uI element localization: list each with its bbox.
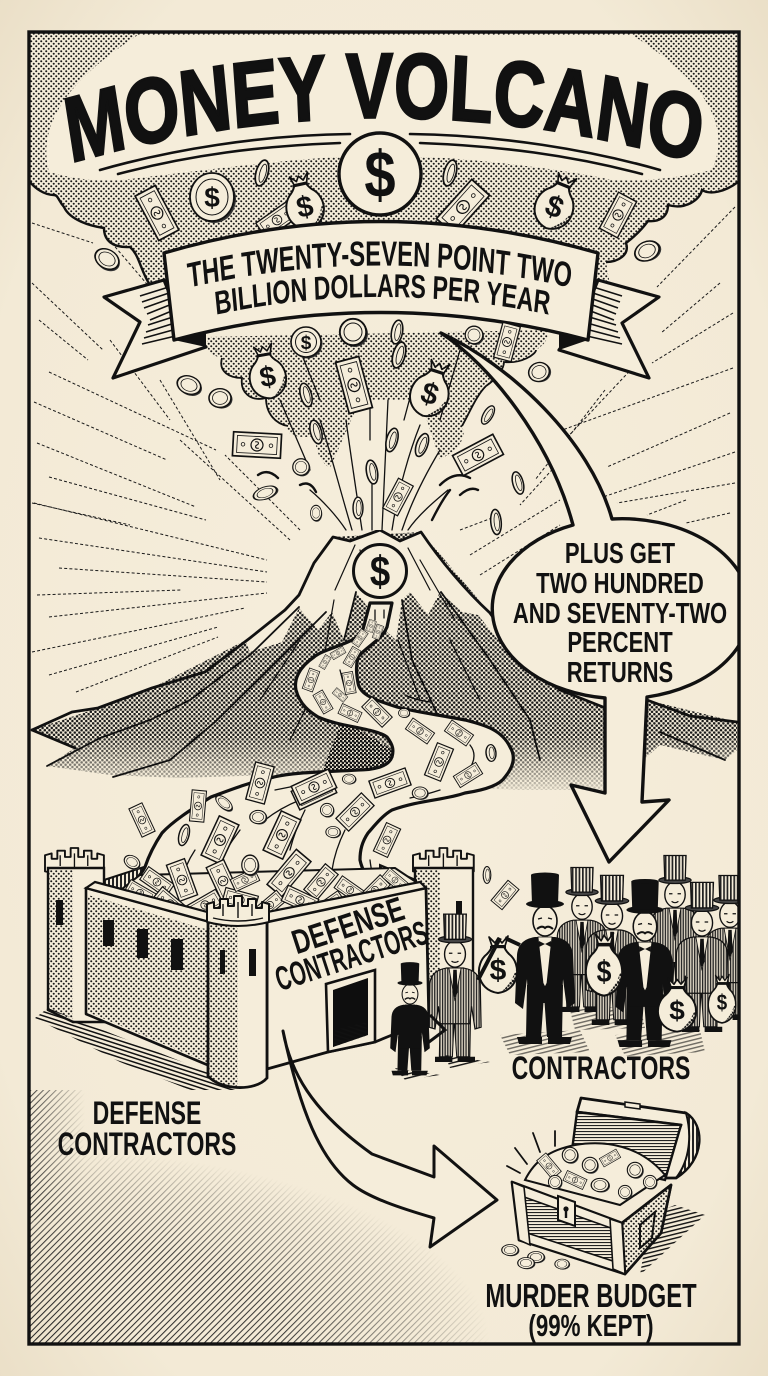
central dollar medallion: $: [364, 138, 396, 211]
front tower: [208, 916, 267, 1088]
grey-suited man: [429, 914, 481, 1062]
cloud outline: [221, 350, 536, 426]
banner text line 2: BILLION DOLLARS PER YEAR: [215, 274, 550, 315]
label: murder budget: [485, 1278, 697, 1343]
river bills: [366, 619, 376, 633]
money bags held: $: [597, 955, 611, 989]
group of contractors: $: [717, 991, 728, 1016]
chest handle: [640, 1212, 655, 1248]
sparkle ticks: [507, 1131, 555, 1173]
chest shadow: [640, 1205, 705, 1275]
erupting streaks: [280, 350, 460, 530]
crater dollar medallion: $: [370, 548, 390, 596]
callout bubble with curved arrow: [441, 333, 750, 862]
wall windows: [103, 920, 114, 946]
snowy cream cap: [245, 530, 498, 652]
left wall: [86, 888, 210, 1066]
callout text: PLUS GET: [565, 538, 675, 570]
arrow from fortress to chest: [283, 1031, 497, 1247]
flying money above banner: $: [540, 189, 569, 226]
fortress: [35, 882, 429, 1090]
flying money above banner: [91, 159, 665, 275]
ground shadow hatching: [35, 1008, 240, 1090]
treasure chest: [502, 1098, 705, 1275]
fortress sign: DEFENSE CONTRACTORS: DEFENSE: [287, 890, 409, 962]
fortress sign: DEFENSE CONTRACTORS: CONTRACTORS: [271, 914, 433, 998]
eruption cloud: [207, 330, 548, 530]
river coins: [398, 709, 410, 718]
flying money below banner: [174, 319, 554, 535]
flying money below banner: $: [301, 333, 312, 354]
flying money below banner: $: [417, 376, 443, 413]
hand-off bag: [479, 936, 517, 993]
banner panel: [164, 222, 598, 340]
flying money below banner: $: [257, 360, 278, 394]
left ribbon tail: [104, 280, 206, 378]
money river: [124, 601, 515, 876]
banner text line 1: THE TWENTY-SEVEN POINT TWO: [186, 241, 572, 286]
label: contractors: CONTRACTORS: [512, 1050, 690, 1086]
cloud scalloped outline: [30, 182, 738, 285]
label: defense contractors: DEFENSE: [93, 1095, 201, 1131]
mountain ink lines: [32, 530, 737, 748]
callout text: PERCENT: [567, 627, 673, 659]
money pile inside fortress: [122, 848, 415, 910]
deep shadow beside river: [322, 726, 392, 770]
label: defense contractors: [58, 1095, 236, 1162]
callout text: AND SEVENTY-TWO: [513, 598, 727, 630]
group of contractors: [390, 856, 756, 1080]
cream title dome: [46, 35, 718, 181]
front tycoons: [515, 872, 575, 1044]
callout text: [513, 538, 727, 689]
fortress back walls: [105, 864, 417, 888]
banner ribbon: [104, 222, 659, 378]
callout text: RETURNS: [567, 657, 673, 689]
spilled coins: [502, 1244, 519, 1256]
mountain halftone: [32, 532, 737, 790]
label: murder budget: (99% KEPT): [528, 1308, 654, 1343]
lower-left diagonal hatching: [30, 1090, 482, 1342]
flying money above banner: $: [293, 189, 316, 225]
back row men: [650, 856, 700, 1000]
treasure pile: [525, 1143, 665, 1205]
callout text: TWO HUNDRED: [536, 568, 704, 600]
crater dollar medallion: [354, 544, 406, 598]
top halftone sky cloud: [30, 33, 738, 285]
label: murder budget: MURDER BUDGET: [485, 1278, 697, 1315]
volcano mountain: [32, 530, 737, 790]
front wall with sign: [267, 888, 429, 1069]
group of contractors: $: [669, 995, 685, 1025]
right ribbon tail: [559, 280, 659, 378]
flying money above banner: $: [204, 182, 220, 213]
title: MONEY VOLCANO: MONEY VOLCANO: [64, 52, 702, 163]
ground shadows: [500, 1005, 705, 1056]
chest lock: [558, 1196, 575, 1226]
mountain base: [32, 532, 737, 790]
hand-off bag: $: [490, 954, 507, 987]
river flow lines: [180, 610, 474, 888]
money bags held: [586, 933, 622, 996]
back crenellated towers of fortress: [45, 848, 474, 1022]
open lid: [577, 1098, 699, 1178]
title flourish lines: [100, 134, 660, 174]
label: defense contractors: CONTRACTORS: [58, 1126, 236, 1162]
fortress door: [326, 970, 375, 1052]
chest body: [512, 1182, 671, 1274]
central dollar medallion: [339, 133, 421, 215]
flying bill and coin: [491, 880, 519, 910]
small man seen from behind, shaking hands: [390, 962, 445, 1075]
sunburst rays: [32, 207, 735, 692]
